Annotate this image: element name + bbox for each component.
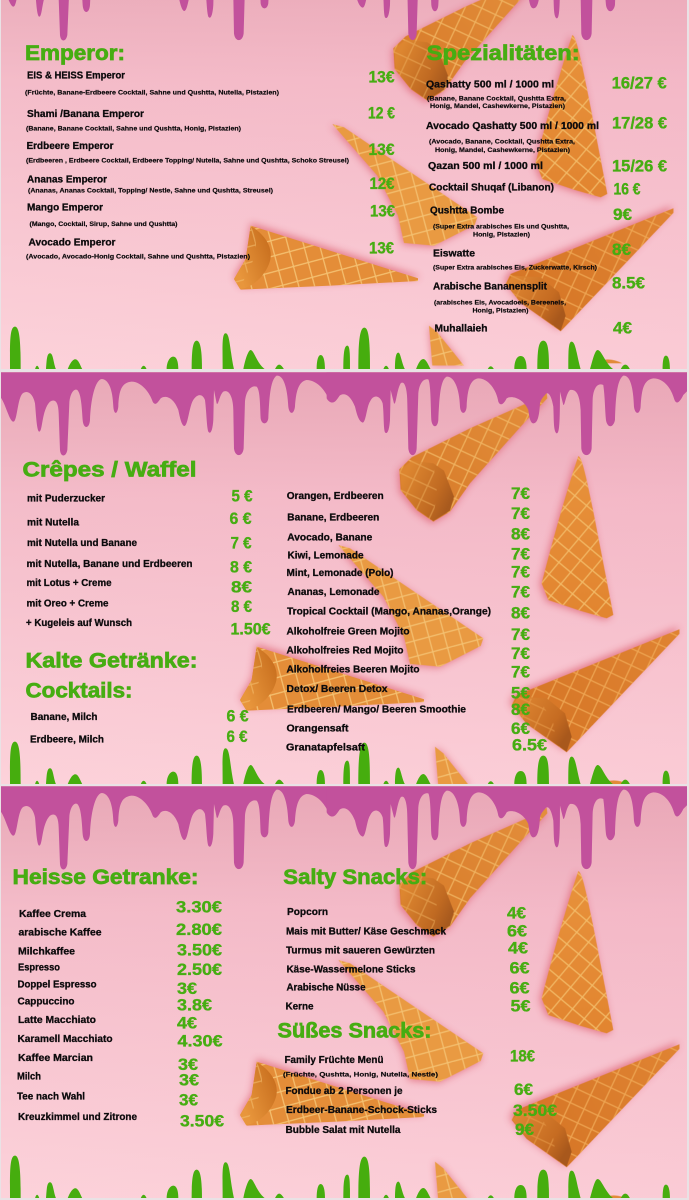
menu item: Detox xyxy=(286,683,530,702)
menu item: Erdbeer-Banane-Schock-Sticks: Erdbeer-Banane-Schock-Sticks xyxy=(286,1104,437,1116)
menu item: Turmus: 4€ xyxy=(508,939,528,957)
menu item: Kugeleis auf Wunsch: 1.50€ xyxy=(230,621,270,639)
heading: Cocktails: Cocktails: xyxy=(26,680,132,703)
menu item: Avocado Qashatty xyxy=(426,115,667,154)
menu item: Banane, Milch: Banane, Milch xyxy=(30,711,98,723)
menu item: Kiwi, Lemonade: Kiwi, Lemonade xyxy=(288,550,364,562)
menu item: Muhallaieh: Muhallaieh xyxy=(434,323,488,335)
menu item: Erdbeere, Milch: 6 € xyxy=(226,728,248,746)
menu item: Espresso: 2.50€ xyxy=(177,961,222,979)
menu item: Arabische Nüsse: Arabische Nüsse xyxy=(286,982,366,994)
menu item: Karamell Macchiato: 4.30€ xyxy=(178,1033,222,1051)
menu item: Orangen, Erdbeeren: Orangen, Erdbeeren xyxy=(287,490,384,502)
menu item: Shami Banana Emperor: Shami /Banana Emperor xyxy=(27,108,144,120)
menu item: Muhallaieh: 4€ xyxy=(613,319,632,337)
menu item: Avocado Emperor: Avocado Emperor xyxy=(28,236,116,248)
menu item: Mint, Lemonade: Mint, Lemonade (Polo) xyxy=(286,567,394,579)
menu item: Espresso xyxy=(18,961,222,979)
menu item: arabische Kaffee: 2.80€ xyxy=(176,921,222,939)
menu item: Tropical Cocktail xyxy=(287,604,530,622)
menu item: Arabische Bananensplit: 8.5€ xyxy=(612,275,645,293)
menu item: Detox: 5€ xyxy=(511,684,530,702)
menu item: Smoothie xyxy=(287,701,530,719)
menu item: Qashatty xyxy=(426,75,667,110)
menu item: Bubble Salat: Bubble Salat mit Nutella xyxy=(286,1124,401,1136)
menu item: Cappuccino: 3.8€ xyxy=(177,997,212,1015)
menu item: EIS & HEISS Emperor: (Früchte, Banane-Erdbeere Cocktail, Sahne und Qushtta, Nutella, Pistazien) xyxy=(25,90,279,97)
menu item: Popcorn: 4€ xyxy=(507,905,526,923)
menu item: Ananas Emperor: Ananas Emperor xyxy=(27,174,107,186)
menu item: Tropical Cocktail: Tropical Cocktail (Mango, Ananas,Orange) xyxy=(287,605,491,617)
menu item: Karamell Macchiato xyxy=(18,1033,222,1051)
menu item: Qushtta Bombe: (Super Extra arabisches Eis und Qushtta, xyxy=(433,224,569,231)
menu item: mit Nutella: mit Nutella xyxy=(27,517,79,529)
menu item: Cappuccino: Cappuccino xyxy=(18,995,74,1007)
heading: Crêpes / Waffel: Crêpes / Waffel xyxy=(22,459,196,482)
menu item: Family Früchte Menü xyxy=(283,1048,535,1079)
menu item: Kaffee Crema: 3.30€ xyxy=(176,899,222,917)
menu item: Erdbeer-Banane-Schock-Sticks: 3.50€ xyxy=(513,1102,557,1120)
menu item: Orangen, Erdbeeren xyxy=(287,485,530,503)
menu item: Kugeleis auf Wunsch: + Kugeleis auf Wunsch xyxy=(26,617,132,629)
menu item: Mango Emperor: 13€ xyxy=(370,202,395,220)
menu item: Alkoholfreies Red Mojito: 7€ xyxy=(511,645,530,663)
menu item: Kaffee Crema xyxy=(19,899,222,920)
menu item: mit Lotus + Creme: 8€ xyxy=(231,579,252,597)
menu item: mit Oreo + Creme xyxy=(26,597,252,616)
menu item: Erdbeere Emperor: (Erdbeeren , Erdbeere Cocktail, Erdbeere Topping/ Nutella, Sahne und Qushtta, Schoko Streusel) xyxy=(26,158,349,165)
menu item: mit Lotus + Creme xyxy=(26,577,252,597)
menu item: Arabische Bananensplit: (arabisches Eis, Avocadoeis, Bereeneis, xyxy=(434,300,566,307)
menu item: Kaffee Marcian xyxy=(18,1052,198,1074)
menu item: Smoothie: Erdbeeren/ Mango/ Beeren Smoothie xyxy=(287,704,466,716)
menu item: Tee nach Wahl: Tee nach Wahl xyxy=(17,1090,85,1102)
menu item: mit Nutella: 6 € xyxy=(230,510,252,528)
menu item: Alkoholfreies Beeren Mojito: Alkoholfreies Beeren Mojito xyxy=(286,663,420,675)
menu item: Alkoholfreies Red Mojito: Alkoholfreies Red Mojito xyxy=(286,645,404,657)
menu item: Kerne: 5€ xyxy=(510,998,530,1016)
menu item: Kiwi, Lemonade xyxy=(288,545,530,563)
menu item: Eiswatte: Eiswatte xyxy=(433,248,475,260)
menu item: Avocado Qashatty: 17/28 € xyxy=(612,115,667,133)
menu item: Avocado Qashatty: Honig, Mandel, Cashewkerne, Pistazien) xyxy=(435,147,570,154)
menu item: Mint, Lemonade: 7€ xyxy=(511,563,530,581)
menu item: Karamell Macchiato: Karamell Macchiato xyxy=(18,1033,112,1045)
menu item: Käse-Wassermelone Sticks: 6€ xyxy=(510,959,530,977)
menu item: Mais mit Butter xyxy=(286,922,527,940)
menu item: EIS & HEISS Emperor xyxy=(25,68,394,97)
menu item: Kugeleis auf Wunsch xyxy=(26,617,270,639)
menu item: Ananas, Lemonade xyxy=(288,583,530,601)
menu item: Banane, Milch: 6 € xyxy=(226,708,248,726)
menu item: Cocktail Shuqaf: 16 € xyxy=(614,181,640,199)
menu item: Kaffee Crema: Kaffee Crema xyxy=(19,908,86,920)
menu item: Turmus: Turmus mit saueren Gewürzten xyxy=(286,944,435,956)
heading: Süßes Snacks: Süßes Snacks: xyxy=(278,1019,432,1042)
menu item: Espresso: Espresso xyxy=(18,962,60,974)
menu item: Avocado, Banane: Avocado, Banane xyxy=(287,531,372,543)
menu item: Popcorn xyxy=(287,905,526,923)
menu item: Fondue: 6€ xyxy=(514,1081,533,1099)
menu item: Latte Macchiato: 4€ xyxy=(177,1014,197,1032)
menu item: Ananas Emperor: 12€ xyxy=(370,175,394,193)
menu item: Kaffee Marcian: Kaffee Marcian xyxy=(18,1052,93,1064)
menu item: Milchkaffee: 3.50€ xyxy=(177,942,222,960)
menu item: mit Nutella und Banane: mit Nutella und Banane xyxy=(27,537,137,549)
menu item: Erdbeere, Milch: Erdbeere, Milch xyxy=(30,734,104,746)
menu item: Cappuccino xyxy=(18,995,212,1015)
menu item: Qashatty: 16/27 € xyxy=(612,75,667,93)
panel: emperor and specialities xyxy=(0,0,689,373)
menu item: Orangensaft: Orangensaft xyxy=(286,722,349,734)
menu item: Avocado Qashatty: (Avocado, Banane, Cocktail, Qushtta Extra, xyxy=(429,138,575,145)
menu item: Kerne: Kerne xyxy=(286,1001,314,1013)
menu item: Alkoholfreie Green Mojito: 7€ xyxy=(511,626,530,644)
menu item: Family Früchte Menü: Family Früchte Menü xyxy=(284,1054,384,1066)
menu item: Qashatty: Honig, Mandel, Cashewkerne, Pistazien) xyxy=(430,103,565,110)
menu item: arabische Kaffee: arabische Kaffee xyxy=(18,926,102,938)
panel 1 background with cones and drips xyxy=(0,0,689,373)
menu item: Mango Emperor: (Mango, Cocktail, Sirup, Sahne und Qushtta) xyxy=(30,221,178,228)
menu item: Cocktail Shuqaf: Cocktail Shuqaf (Libanon) xyxy=(429,182,554,194)
menu item: Erdbeere Emperor xyxy=(26,140,394,165)
menu item: Cocktail Shuqaf xyxy=(429,181,640,199)
menu item: Latte Macchiato: Latte Macchiato xyxy=(18,1014,96,1026)
menu item: Qashatty: (Banane, Banane Cocktail, Qushtta Extra, xyxy=(427,96,566,103)
menu item: Erdbeere Emperor: Erdbeere Emperor xyxy=(26,140,114,152)
menu item: Milch: Milch xyxy=(17,1071,41,1083)
menu item: Bubble Salat xyxy=(286,1121,534,1139)
menu item: Ananas, Lemonade: Ananas, Lemonade xyxy=(288,586,380,598)
heading: Kalte Getränke: Kalte Getränke: xyxy=(26,649,198,672)
menu item: Muhallaieh xyxy=(434,319,632,337)
menu item: Family Früchte Menü: 18€ xyxy=(510,1048,535,1066)
menu item: Doppel Espresso: 3€ xyxy=(177,980,197,998)
menu item: Avocado Emperor: (Avocado, Avocado-Honig Cocktail, Sahne und Qushtta, Pistazien) xyxy=(26,253,250,260)
panel: hot drinks and snacks xyxy=(0,786,689,1200)
menu item: Kerne xyxy=(286,998,530,1016)
heading: Spezialitäten: Spezialitäten: xyxy=(427,42,580,65)
menu item: mit Oreo + Creme: mit Oreo + Creme xyxy=(26,597,109,609)
menu item: Avocado Qashatty: Avocado Qashatty 500 ml / 1000 ml xyxy=(426,120,599,132)
menu item: Popcorn: Popcorn xyxy=(287,906,328,918)
menu item: Arabische Bananensplit: Arabische Bananensplit xyxy=(433,280,547,292)
menu item: Latte Macchiato xyxy=(18,1014,197,1032)
menu item: Orangensaft xyxy=(286,720,530,738)
menu item: mit Puderzucker xyxy=(27,488,252,506)
menu item: mit Puderzucker: mit Puderzucker xyxy=(27,493,105,505)
menu item: Banane, Erdbeeren xyxy=(287,505,530,524)
menu item: Mais mit Butter: 6€ xyxy=(507,922,527,940)
menu item: Alkoholfreies Beeren Mojito: 7€ xyxy=(511,664,530,682)
menu item: Qushtta Bombe: 9€ xyxy=(613,206,632,224)
menu item: Avocado, Banane xyxy=(287,525,530,543)
menu item: Doppel Espresso: Doppel Espresso xyxy=(18,979,96,991)
menu item: Erdbeere Emperor: 13€ xyxy=(368,141,394,159)
menu item: Fondue: Fondue ab 2 Personen je xyxy=(286,1085,403,1097)
menu item: Milch: 3€ xyxy=(179,1072,199,1090)
menu item: Arabische Nüsse xyxy=(286,979,530,997)
menu item: Qashatty: Qashatty 500 ml / 1000 ml xyxy=(426,78,554,90)
menu item: Eiswatte: 8€ xyxy=(612,241,631,259)
menu item: Kreuzkimmel und Zitrone xyxy=(18,1111,224,1131)
menu item: Mango Emperor: Mango Emperor xyxy=(27,202,103,214)
menu item: Arabische Bananensplit xyxy=(433,275,645,315)
menu item: Kreuzkimmel und Zitrone: Kreuzkimmel und Zitrone xyxy=(18,1111,137,1123)
menu item: Arabische Nüsse: 6€ xyxy=(510,979,530,997)
menu item: Kaffee Marcian: 3€ xyxy=(178,1056,198,1074)
menu item: EIS & HEISS Emperor: 13€ xyxy=(368,68,394,86)
menu item: Alkoholfreies Beeren Mojito xyxy=(286,663,530,682)
menu item: Ananas Emperor: (Ananas, Ananas Cocktail, Topping/ Nestle, Sahne und Qushtta, Streusel) xyxy=(28,188,273,195)
menu item: Doppel Espresso xyxy=(18,979,197,998)
menu item: mit Puderzucker: 5 € xyxy=(232,488,252,506)
menu item: Smoothie: 8€ xyxy=(511,701,530,719)
menu item: Banane, Milch xyxy=(30,708,248,726)
menu item: Qushtta Bombe xyxy=(430,204,632,239)
menu item: Tropical Cocktail: 8€ xyxy=(511,604,530,622)
menu item: Tee nach Wahl xyxy=(17,1090,198,1110)
panel 3 background with cones and drips xyxy=(0,786,689,1200)
menu item: Orangen, Erdbeeren: 7€ xyxy=(511,485,530,503)
menu item: Banane, Erdbeeren: 7€ xyxy=(511,505,530,523)
menu item: Shami Banana Emperor xyxy=(26,105,395,132)
menu item: Turmus xyxy=(286,939,528,957)
menu item: Granatapfelsaft: 6.5€ xyxy=(512,737,547,755)
menu item: Mango Emperor xyxy=(27,202,395,228)
heading: Emperor: Emperor: xyxy=(25,42,125,65)
heading: Salty Snacks: Salty Snacks: xyxy=(283,866,427,889)
menu item: Qazan xyxy=(428,158,667,176)
menu item: Mais mit Butter: Mais mit Butter/ Käse Geschmack xyxy=(286,926,446,938)
menu item: Shami Banana Emperor: (Banane, Banane Cocktail, Sahne und Qushtta, Honig, Pistazien) xyxy=(26,125,241,132)
menu item: Ananas Emperor xyxy=(27,174,394,195)
menu item: Shami Banana Emperor: 12 € xyxy=(368,105,395,123)
menu item: mit Nutella und Banane: 7 € xyxy=(230,535,252,553)
menu item: Alkoholfreie Green Mojito: Alkoholfreie Green Mojito xyxy=(286,626,410,638)
menu item: EIS & HEISS Emperor: EIS & HEISS Emperor xyxy=(27,70,125,82)
menu item: Tee nach Wahl: 3€ xyxy=(179,1092,198,1110)
menu item: Fondue xyxy=(286,1081,533,1099)
menu item: Erdbeere, Milch xyxy=(30,728,248,746)
menu item: mit Oreo + Creme: 8 € xyxy=(231,598,252,616)
menu item: Eiswatte xyxy=(433,241,631,272)
heading: Heisse Getranke: Heisse Getranke: xyxy=(12,866,198,889)
menu item: Qazan: Qazan 500 ml / 1000 ml xyxy=(428,160,543,172)
menu item: mit Nutella, Banane und Erdbeeren: mit Nutella, Banane und Erdbeeren xyxy=(26,558,192,570)
menu item: Family Früchte Menü: (Früchte, Qushtta, Honig, Nutella, Nestle) xyxy=(283,1072,438,1079)
menu item: mit Nutella, Banane und Erdbeeren: 8 € xyxy=(230,558,252,576)
menu item: mit Nutella, Banane und Erdbeeren xyxy=(26,558,252,576)
menu item: mit Lotus + Creme: mit Lotus + Creme xyxy=(26,577,112,589)
menu item: mit Nutella und Banane xyxy=(27,535,252,553)
menu item: Avocado Emperor: 13€ xyxy=(369,239,394,257)
menu item: Milch xyxy=(17,1071,199,1090)
menu item: Alkoholfreie Green Mojito xyxy=(286,626,530,644)
panel: crepes and cold drinks xyxy=(0,372,689,787)
menu item: Banane, Erdbeeren: Banane, Erdbeeren xyxy=(287,512,379,524)
menu item: Qazan: 15/26 € xyxy=(612,158,667,176)
menu item: Mint, Lemonade xyxy=(286,563,530,581)
menu item: Milchkaffee xyxy=(18,942,222,960)
menu item: Kiwi, Lemonade: 7€ xyxy=(511,545,530,563)
menu item: Orangensaft: 6€ xyxy=(511,720,530,738)
menu item: Granatapfelsaft xyxy=(286,737,547,755)
panel 2 background with cones and drips xyxy=(0,372,689,787)
menu item: Qushtta Bombe: Honig, Pistazien) xyxy=(473,232,530,239)
menu item: Detox: Detox/ Beeren Detox xyxy=(286,683,388,695)
menu item: Ananas, Lemonade: 7€ xyxy=(511,583,530,601)
menu item: Bubble Salat: 9€ xyxy=(515,1121,534,1139)
menu item: Eiswatte: (Super Extra arabisches Eis, Zuckerwatte, Kirsch) xyxy=(433,265,597,272)
menu item: Arabische Bananensplit: Honig, Pistazien) xyxy=(472,308,528,315)
menu item: Qushtta Bombe: Qushtta Bombe xyxy=(430,204,504,216)
menu item: Avocado Emperor xyxy=(26,236,394,260)
menu item: Erdbeer-Banane-Schock-Sticks xyxy=(286,1102,557,1120)
menu item: arabische Kaffee xyxy=(18,921,222,939)
menu item: Avocado, Banane: 8€ xyxy=(511,525,530,543)
menu item: mit Nutella xyxy=(27,510,252,529)
menu item: Milchkaffee: Milchkaffee xyxy=(18,945,75,957)
menu item: Käse-Wassermelone Sticks xyxy=(286,959,530,977)
menu item: Kreuzkimmel und Zitrone: 3.50€ xyxy=(180,1113,224,1131)
menu item: Käse-Wassermelone Sticks: Käse-Wassermelone Sticks xyxy=(286,964,416,976)
menu item: Alkoholfreies Red Mojito xyxy=(286,645,530,663)
menu item: Granatapfelsaft: Granatapfelsaft xyxy=(286,741,366,753)
